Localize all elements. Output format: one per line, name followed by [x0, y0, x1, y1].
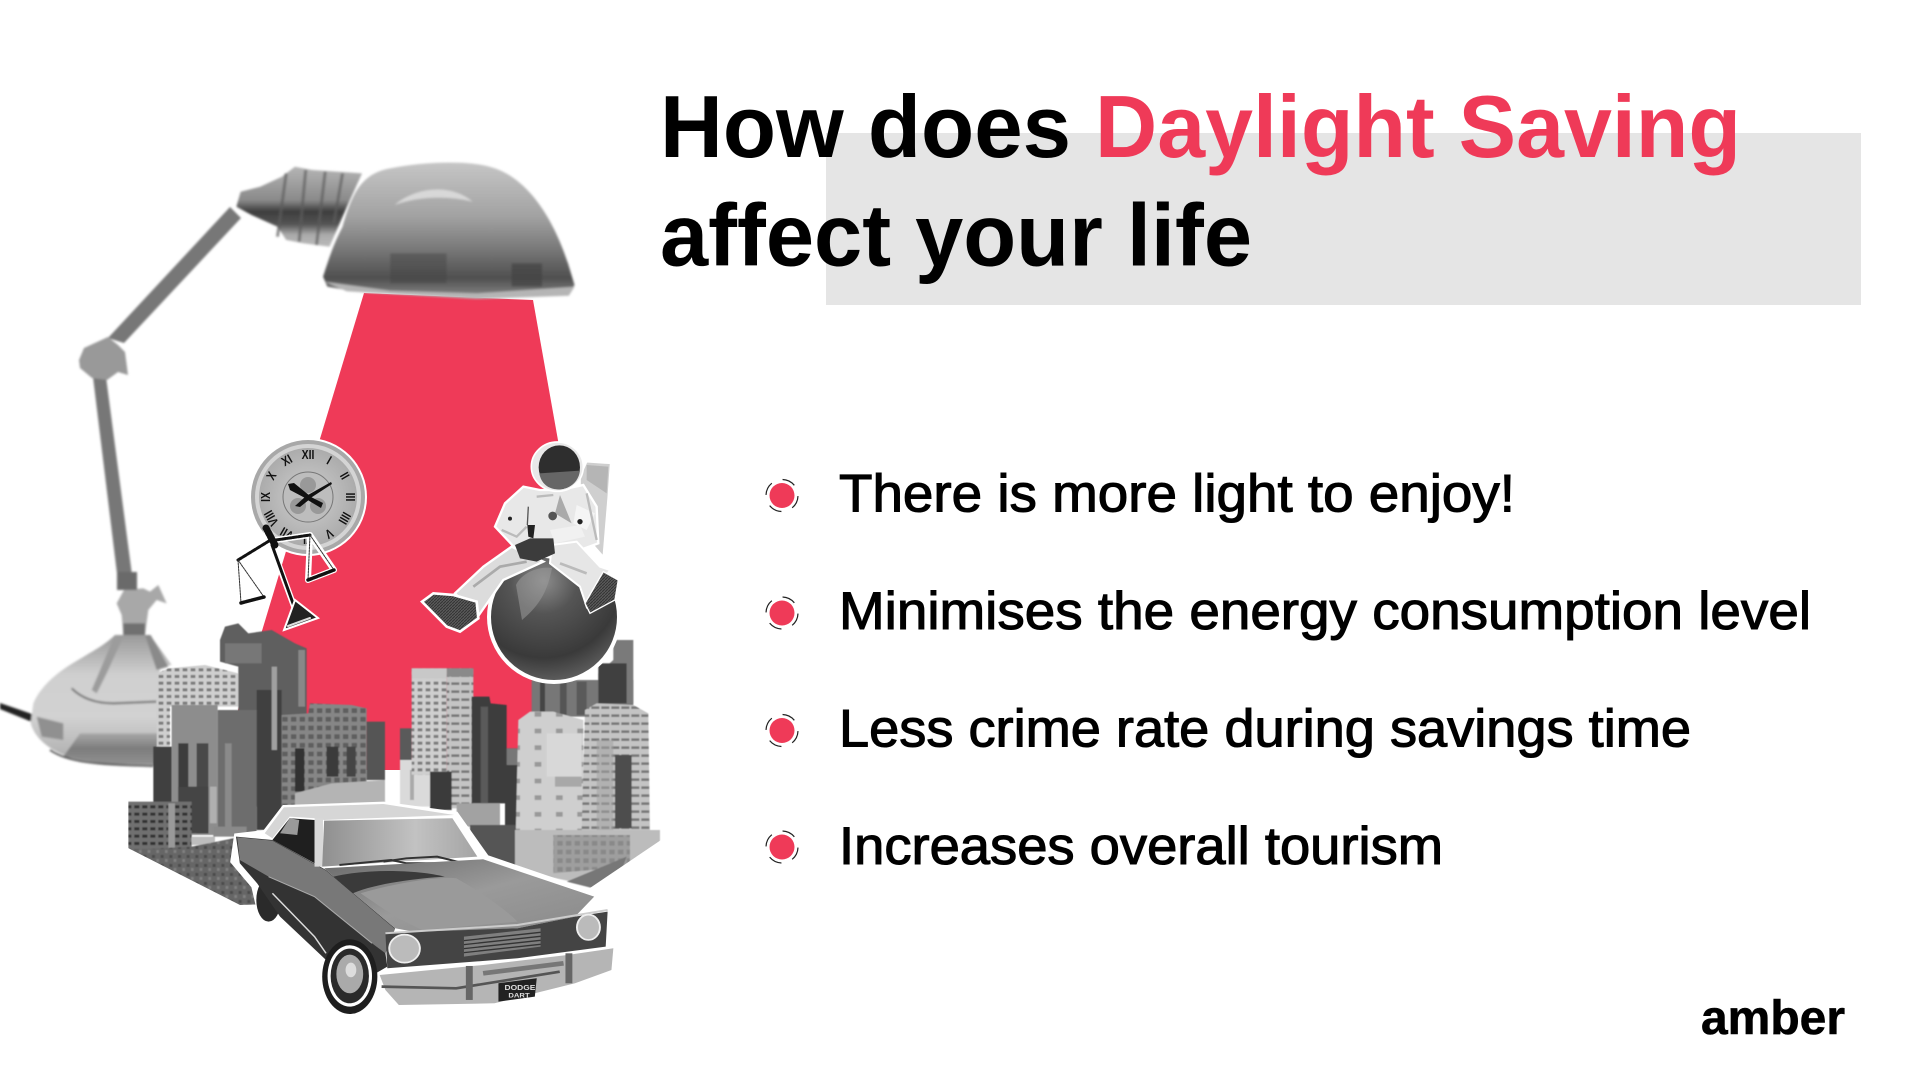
wall clock: IX: [259, 492, 273, 502]
bullet list: [765, 464, 1811, 876]
bullet 2: [765, 582, 1811, 641]
left city block: [128, 623, 385, 907]
grey title backdrop: [826, 133, 1861, 305]
car roof: [265, 804, 454, 838]
city skyline: [128, 623, 660, 907]
grille: [385, 912, 608, 968]
tall left tower: [220, 623, 307, 807]
backpack: [580, 462, 611, 557]
bumper: [380, 948, 613, 1005]
front small building: [128, 800, 192, 850]
illustration: lamp and city collage: [0, 162, 660, 1015]
arm joint: [79, 337, 128, 380]
wall clock: IIII: [335, 509, 353, 527]
astronaut: [422, 442, 618, 632]
wall clock: VII: [278, 524, 296, 543]
left boot: [422, 593, 478, 632]
wall clock: VI: [303, 532, 313, 546]
rear left building: [157, 665, 238, 747]
desk lamp: [0, 162, 575, 767]
right light tower: [515, 710, 584, 830]
city base: [514, 830, 660, 882]
bullet text 2: Minimises the energy consumption level: [839, 582, 1811, 641]
title: affect your life: [660, 186, 1252, 284]
bullet text 3: Less crime rate during savings time: [839, 700, 1691, 758]
left leg: [455, 547, 543, 618]
upper arm: [108, 207, 241, 343]
torso: [495, 485, 598, 558]
bullet icon 2: [765, 596, 799, 630]
car side: [236, 837, 395, 973]
hood: [324, 859, 594, 933]
bullet icon 4: [765, 830, 799, 864]
lamp base bell: [31, 635, 172, 767]
light beam: [220, 293, 590, 770]
license plate: DODGE: [505, 983, 535, 992]
scales of justice: [238, 528, 334, 630]
title: [660, 77, 1741, 284]
bullet 1: [765, 464, 1515, 524]
far right tower: [582, 703, 650, 830]
dark corner building: [153, 747, 172, 803]
low building left: [400, 728, 412, 762]
headlights: [389, 935, 420, 963]
low light block: [295, 780, 385, 807]
light band: [192, 837, 215, 845]
wall clock: V: [322, 525, 336, 541]
right boot: [585, 572, 618, 613]
low trees: [134, 838, 256, 905]
wall clock: X: [264, 469, 280, 483]
bullet 4: [765, 817, 1443, 876]
wall clock: XII: [302, 448, 314, 462]
lamp shade: [323, 162, 575, 298]
right leg: [550, 542, 610, 607]
right mid building: [282, 703, 367, 807]
back right towers: [532, 680, 633, 717]
title: How does: [660, 77, 1071, 176]
gloves: [515, 538, 555, 562]
side window: [272, 818, 315, 863]
wall clock: II: [337, 470, 352, 482]
bullet icon 3: [765, 714, 799, 747]
wall clock: [249, 438, 367, 556]
title: Daylight Saving: [1095, 77, 1741, 176]
ball: [489, 552, 619, 682]
license plate: DART: [508, 992, 530, 999]
brand logo: amber: [1701, 992, 1845, 1045]
dark low block: [430, 772, 452, 810]
light high-rise: [412, 668, 447, 775]
car white outline: [232, 803, 613, 1015]
lamp ball joint: [117, 585, 167, 635]
bullet icon 1: [765, 479, 799, 512]
lamp socket: [236, 167, 362, 247]
wall clock: XI: [279, 452, 295, 469]
wall clock: VIII: [262, 508, 282, 528]
glass building: [172, 705, 218, 835]
windshield: [322, 818, 477, 867]
car: [232, 803, 613, 1015]
lamp cable: [0, 703, 32, 722]
wall clock: III: [343, 493, 357, 501]
dark tower: [472, 697, 518, 827]
bushes centre: [469, 824, 517, 864]
base shading: [63, 733, 160, 764]
bullet text 1: There is more light to enjoy!: [839, 464, 1515, 524]
wall clock: I: [324, 454, 334, 468]
license plate: [498, 978, 537, 1002]
low block: [457, 803, 500, 827]
rear wheel: [256, 878, 281, 922]
lower arm: [93, 377, 134, 590]
bullet text 4: Increases overall tourism: [839, 817, 1443, 876]
helmet: [531, 442, 583, 491]
right city block: [400, 640, 660, 893]
front wheel: [322, 939, 377, 1014]
arm: [550, 525, 585, 543]
bullet 3: [765, 700, 1691, 758]
